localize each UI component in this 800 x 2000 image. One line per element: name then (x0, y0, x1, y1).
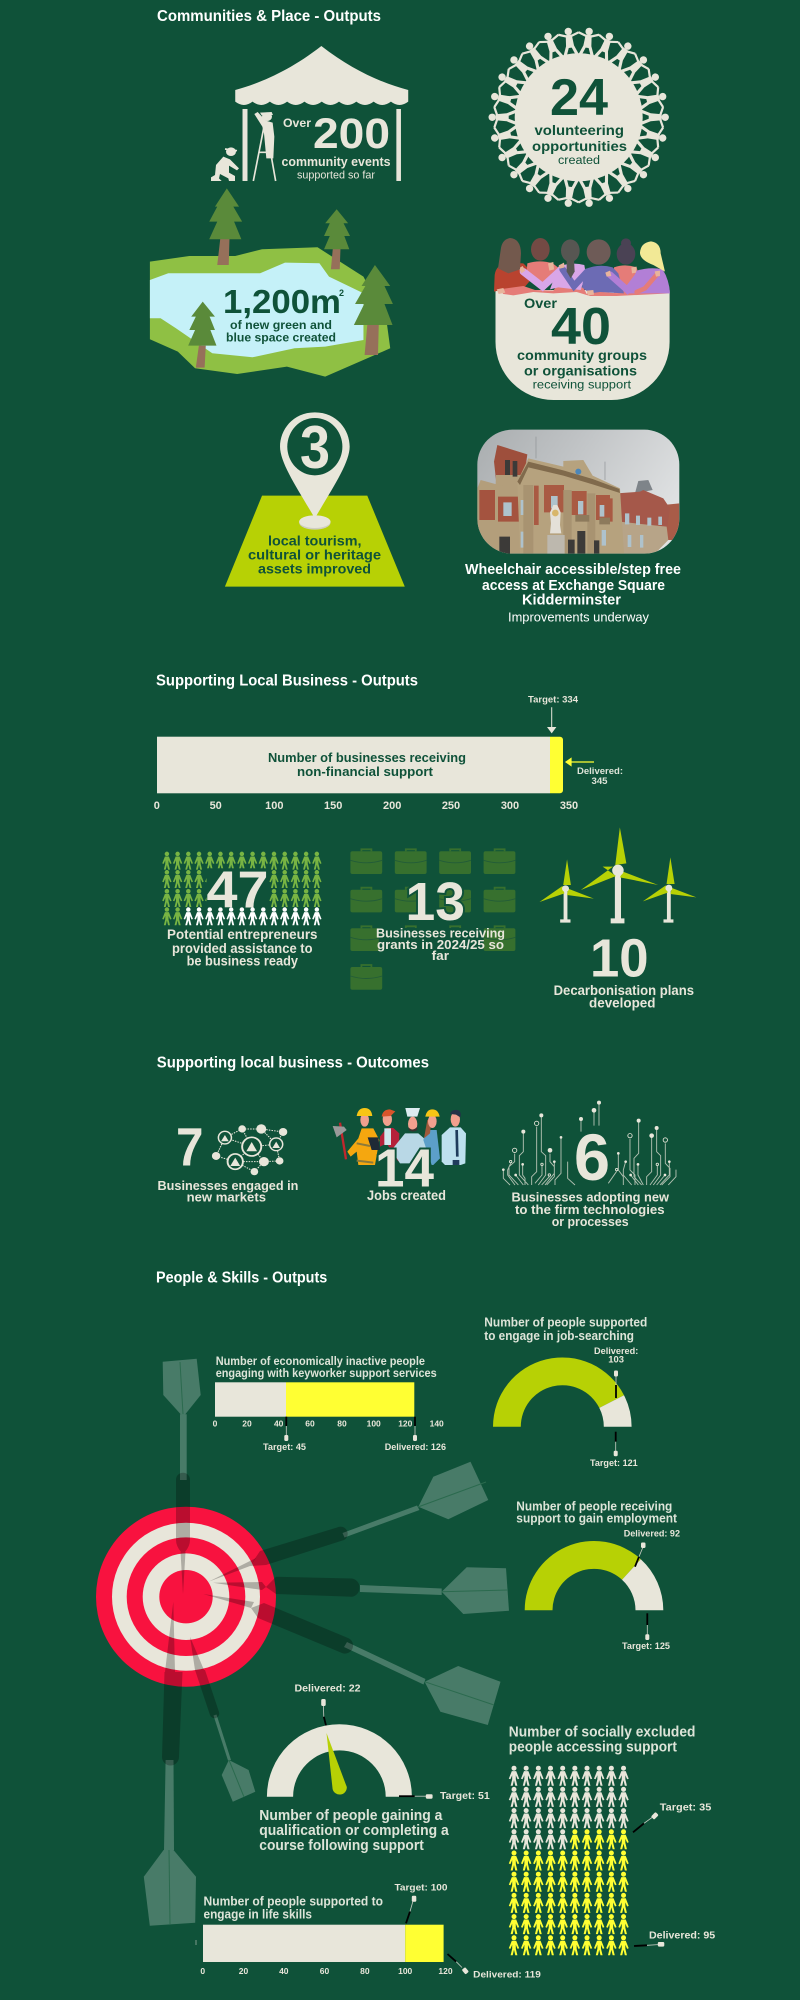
number: 3: 3 (300, 414, 330, 481)
label: opportunities: opportunities (532, 139, 627, 154)
chart: qualification gauge (259, 1683, 490, 1854)
panel: heritage assets pin (225, 412, 405, 587)
panel: green and blue space (150, 188, 393, 377)
gauge: delivered arc (525, 1541, 641, 1610)
axis labels: 250 (442, 800, 460, 812)
heading: Supporting Local Business: Supporting Local Business - Outputs (156, 673, 418, 690)
label: chart title line 2: support to gain employment (516, 1512, 678, 1526)
axis labels: 100 (265, 800, 283, 812)
icon: group of people hugging (494, 238, 670, 296)
label: Target 125: Target: 125 (622, 1641, 671, 1652)
tick mark (195, 1940, 197, 1945)
icon: network (212, 1124, 287, 1175)
label: receiving support: receiving support (533, 379, 632, 391)
number: 14: 14 (375, 1139, 434, 1199)
icon: target dart (633, 1812, 659, 1832)
label: delivered value: 103 (608, 1355, 624, 1366)
gauge: remaining arc (622, 1559, 663, 1610)
number: 40: 40 (551, 298, 611, 356)
label: Wheelchair accessible/step free: Wheelchair accessible/step free (465, 562, 681, 578)
icon: target dart (284, 1417, 288, 1441)
axis labels: 20 (239, 1966, 248, 1976)
label: Target 51: Target: 51 (440, 1790, 490, 1802)
bar: delivered portion (405, 1925, 444, 1962)
label: Over: Over (524, 295, 558, 311)
number: 13: 13 (406, 872, 465, 932)
number: 6: 6 (574, 1120, 610, 1194)
icon: ring of people (488, 27, 669, 208)
icon: dart barrels (162, 1473, 360, 1766)
label: cultural or heritage: cultural or heritage (248, 548, 382, 563)
number: 200: 200 (313, 110, 390, 158)
axis labels: 0 (200, 1966, 205, 1976)
bar: delivered portion (286, 1382, 414, 1417)
axis labels: 60 (305, 1419, 315, 1429)
label: access at Exchange Square: access at Exchange Square (482, 578, 665, 594)
chart: life skills bar (196, 1883, 541, 1980)
panel: jobs created (333, 1108, 466, 1203)
label: chart title line 2: to engage in job-searching (484, 1329, 634, 1343)
axis labels (200, 1966, 453, 1976)
label: qualification or completing a: qualification or completing a (259, 1823, 450, 1839)
arrow: delivered (566, 758, 594, 766)
pictogram: delivered people (509, 1829, 629, 1955)
label: delivered value: 345 (592, 776, 608, 787)
axis labels: 140 (430, 1419, 444, 1429)
chart: job-searching gauge (484, 1316, 647, 1469)
axis labels: 150 (324, 800, 342, 812)
label: Potential entrepreneurs: Potential entrepreneurs (167, 927, 318, 942)
gauge: target arc (267, 1724, 412, 1797)
bar: target portion (203, 1925, 405, 1962)
axis labels: 50 (210, 800, 222, 812)
axis labels: 350 (560, 800, 578, 812)
axis labels: 100 (367, 1419, 381, 1429)
text backdrop (379, 928, 483, 962)
pictogram: 13 briefcases (350, 849, 515, 990)
icon: target dart (614, 1432, 618, 1456)
icon: circuit (502, 1101, 676, 1185)
icon: tent canopy (235, 46, 408, 181)
label: assets improved: assets improved (258, 562, 371, 577)
panel: non-financial support bar chart (154, 695, 623, 812)
panel: potential entrepreneurs (162, 852, 322, 969)
label: Delivered: Delivered: (594, 1346, 638, 1357)
panel: decarbonisation (539, 827, 696, 1010)
bar: target portion (215, 1382, 286, 1417)
label: Improvements underway: Improvements underway (508, 611, 650, 625)
label: bar title line 2: non-financial support (297, 764, 434, 779)
label: Delivered 126: Delivered: 126 (385, 1442, 446, 1453)
label: Delivered 95: Delivered: 95 (649, 1929, 715, 1941)
label: local tourism: local tourism, (268, 534, 362, 549)
icon: delivered dart (634, 1942, 664, 1947)
label: supported so far: supported so far (297, 170, 375, 182)
heading: People & Skills: People & Skills - Outputs (156, 1270, 327, 1287)
icon: delivered dart (448, 1954, 469, 1975)
icon: delivered dart (321, 1699, 326, 1727)
label: Target 35: Target: 35 (660, 1802, 711, 1814)
label: course following support: course following support (259, 1838, 424, 1854)
label: Number of people gaining a: Number of people gaining a (259, 1808, 443, 1824)
label: chart title: Number of socially excluded (509, 1724, 695, 1741)
axis labels: 80 (337, 1419, 347, 1429)
axis labels: 40 (279, 1966, 289, 1976)
number: 1,200m2: 1,200m (223, 283, 341, 320)
icon: dart tips (165, 1552, 266, 1672)
axis labels: 0 (213, 1419, 218, 1429)
label: created: created (558, 155, 600, 167)
number backdrop (206, 868, 270, 907)
label: developed: developed (589, 995, 656, 1010)
axis labels: 120 (398, 1419, 413, 1429)
label: be business ready: be business ready (187, 954, 298, 969)
number: 47: 47 (206, 861, 268, 919)
panel: business grants (350, 849, 515, 990)
icon: wind turbines (539, 827, 696, 923)
label: blue space created: blue space created (226, 331, 336, 345)
axis labels: 200 (383, 800, 401, 812)
number: 10: 10 (590, 929, 649, 989)
axis labels: 100 (398, 1966, 413, 1976)
icon: target dart (399, 1794, 433, 1799)
label: to the firm technologies: to the firm technologies (515, 1202, 665, 1217)
label: Target 334: Target: 334 (528, 695, 579, 706)
axis labels (213, 1419, 444, 1429)
label: chart title: Number of people supported to (204, 1895, 383, 1909)
heading: Supporting local business outcomes: Supporting local business - Outcomes (157, 1054, 429, 1071)
icon: delivered dart (614, 1370, 618, 1398)
label: chart title line 2: engage in life skills (204, 1907, 312, 1921)
icon: flight centre lines (169, 1362, 508, 1924)
label: Target 100: Target: 100 (394, 1883, 448, 1894)
label: Delivered 22: Delivered: 22 (294, 1683, 361, 1695)
label: bar title: Number of businesses receiving (268, 750, 466, 765)
heading: Communities & Place: Communities & Place - Outputs (157, 8, 381, 25)
illustration: dartboard with darts (96, 1359, 509, 1926)
axis labels: 20 (242, 1419, 252, 1429)
label: Target 121: Target: 121 (590, 1458, 638, 1469)
label: Delivered 119: Delivered: 119 (473, 1969, 541, 1980)
chart: gain employment gauge (516, 1500, 680, 1652)
label: community events: community events (282, 155, 391, 169)
label: chart title line 2: engaging with keyworker support services (216, 1368, 437, 1380)
bar: target portion (157, 737, 550, 793)
label: far: far (432, 948, 449, 963)
label: community groups: community groups (517, 348, 647, 363)
panel: community groups (494, 238, 670, 400)
axis labels (154, 800, 578, 812)
icon: lake and trees (150, 188, 393, 377)
icon: target dart (645, 1613, 649, 1640)
label: Over: Over (283, 116, 311, 130)
pictogram: target people (509, 1766, 629, 1849)
axis labels: 0 (154, 800, 160, 812)
panel: new technologies (502, 1101, 676, 1229)
label: Businesses engaged in: Businesses engaged in (158, 1178, 298, 1193)
icon: dartboard (96, 1507, 276, 1687)
label: chart title: Number of people receiving (516, 1500, 672, 1514)
panel: community events tent (211, 46, 408, 182)
chart: socially excluded pictogram (509, 1724, 715, 1955)
gauge: needle (326, 1733, 347, 1795)
number: 24: 24 (550, 69, 608, 127)
number: 7: 7 (176, 1118, 204, 1178)
panel: new markets (158, 1118, 298, 1205)
gauge: delivered arc (493, 1357, 624, 1427)
label: or organisations: or organisations (524, 364, 637, 379)
axis labels: 120 (438, 1966, 453, 1976)
label: chart title: Number of people supported (484, 1316, 647, 1330)
label: grants in 2024/25 so: grants in 2024/25 so (377, 937, 504, 952)
label: Delivered 345: Delivered: (577, 766, 623, 777)
label: of new green and: of new green and (230, 318, 332, 332)
image: town hall building (477, 430, 680, 554)
label: squared: 2 (339, 288, 344, 298)
label: Kidderminster: Kidderminster (522, 593, 621, 609)
icon: workers (333, 1108, 466, 1165)
label: Jobs created: Jobs created (367, 1188, 446, 1203)
label: Businesses receiving: Businesses receiving (376, 925, 505, 940)
label: chart title: Number of economically inactive people (216, 1356, 425, 1368)
icon: target dart (406, 1896, 416, 1923)
label: volunteering: volunteering (534, 123, 624, 138)
icon: dart flights and shafts (144, 1359, 509, 1926)
label: Delivered 92: Delivered: 92 (624, 1529, 680, 1540)
axis labels: 40 (274, 1419, 284, 1429)
icon: map pin on ground (225, 412, 405, 587)
label: Businesses adopting new: Businesses adopting new (512, 1190, 670, 1205)
panel: volunteering ring (488, 27, 669, 208)
axis labels: 80 (360, 1966, 370, 1976)
pictogram: 60 people (162, 852, 322, 925)
gauge: remaining arc (599, 1395, 632, 1427)
arrow: target (548, 707, 555, 732)
label: new markets: new markets (187, 1190, 266, 1205)
icon: delivered dart (635, 1542, 646, 1567)
axis labels: 300 (501, 800, 519, 812)
label: chart title line 2: people accessing support (509, 1739, 677, 1756)
chart: keyworker support bar (213, 1356, 446, 1453)
icon: workers on ladder (211, 112, 276, 181)
label: Target 45: Target: 45 (263, 1442, 307, 1453)
label: Decarbonisation plans: Decarbonisation plans (554, 983, 694, 998)
card background (496, 290, 670, 400)
axis labels: 60 (320, 1966, 329, 1976)
bar: delivered portion (550, 737, 563, 793)
label: or processes: or processes (552, 1214, 629, 1229)
icon: delivered dart (413, 1417, 417, 1441)
panel: Exchange Square photo (465, 425, 690, 625)
label: provided assistance to: provided assistance to (172, 941, 312, 956)
